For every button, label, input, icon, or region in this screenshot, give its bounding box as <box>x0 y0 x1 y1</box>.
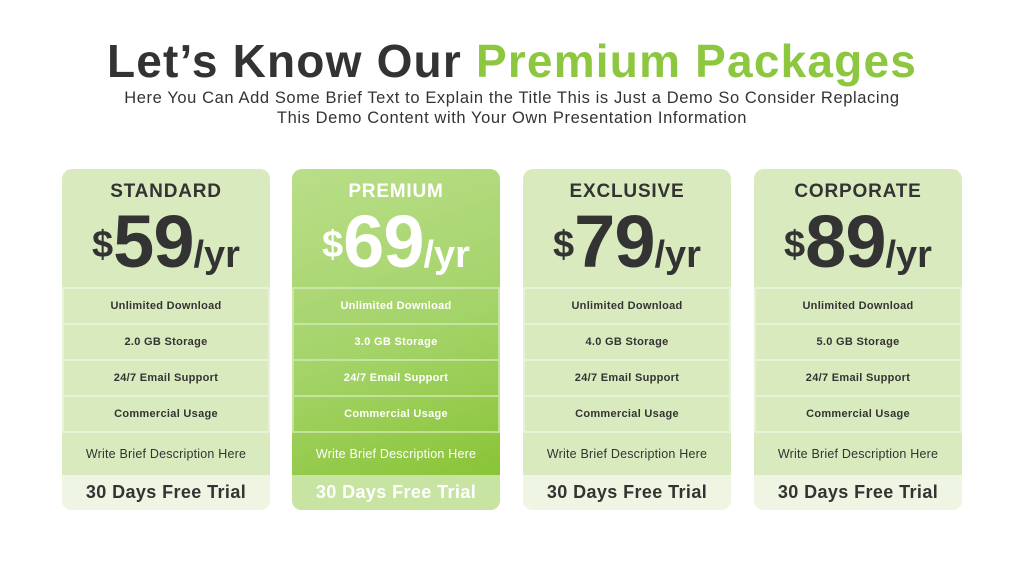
panel: exclusive: Unlimited Download <box>571 300 683 312</box>
panel: exclusive: Commercial Usage <box>575 408 679 420</box>
panel: exclusive: Write Brief Description Here <box>547 447 707 461</box>
subtitle: This Demo Content with Your Own Presentation Information <box>277 109 747 127</box>
panel: premium: 3.0 GB Storage <box>354 336 438 348</box>
panel: standard <box>62 169 270 510</box>
panel: corporate: $89/yr <box>784 200 932 283</box>
panel: premium: 30 Days Free Trial <box>316 482 476 502</box>
panel: standard: STANDARD <box>110 181 222 202</box>
panel: exclusive: 24/7 Email Support <box>575 372 679 384</box>
panel: corporate <box>754 169 962 510</box>
panel: standard: 24/7 Email Support <box>114 372 218 384</box>
panel: exclusive: 30 Days Free Trial <box>547 482 707 502</box>
panel: corporate: 5.0 GB Storage <box>816 336 900 348</box>
panel: premium: PREMIUM <box>348 181 444 202</box>
panel: standard: Commercial Usage <box>114 408 218 420</box>
panel: standard: 2.0 GB Storage <box>124 336 208 348</box>
panel: premium: 24/7 Email Support <box>344 372 448 384</box>
title: Let’s Know Our Premium Packages <box>107 35 917 87</box>
panel: exclusive: 4.0 GB Storage <box>585 336 669 348</box>
panel: exclusive: $79/yr <box>553 200 701 283</box>
panel: standard: Write Brief Description Here <box>86 447 246 461</box>
panel: premium: Write Brief Description Here <box>316 447 476 461</box>
panel: standard: Unlimited Download <box>110 300 222 312</box>
panel: corporate: 30 Days Free Trial <box>778 482 938 502</box>
panel: corporate: Write Brief Description Here <box>778 447 938 461</box>
subtitle: Here You Can Add Some Brief Text to Explain the Title This is Just a Demo So Consider Replacing <box>124 89 900 107</box>
panel: premium: Unlimited Download <box>340 300 452 312</box>
panel: corporate: Commercial Usage <box>806 408 910 420</box>
panel: standard: $59/yr <box>92 200 240 283</box>
panel: premium <box>292 169 500 510</box>
panel: corporate: Unlimited Download <box>802 300 914 312</box>
panel: premium: $69/yr <box>322 200 470 283</box>
subtitle <box>124 89 900 127</box>
panel: corporate: 24/7 Email Support <box>806 372 910 384</box>
panel: corporate: CORPORATE <box>794 181 922 202</box>
panel: exclusive: EXCLUSIVE <box>570 181 684 202</box>
panel: standard: 30 Days Free Trial <box>86 482 246 502</box>
panel: exclusive <box>523 169 731 510</box>
panel: premium: Commercial Usage <box>344 408 448 420</box>
